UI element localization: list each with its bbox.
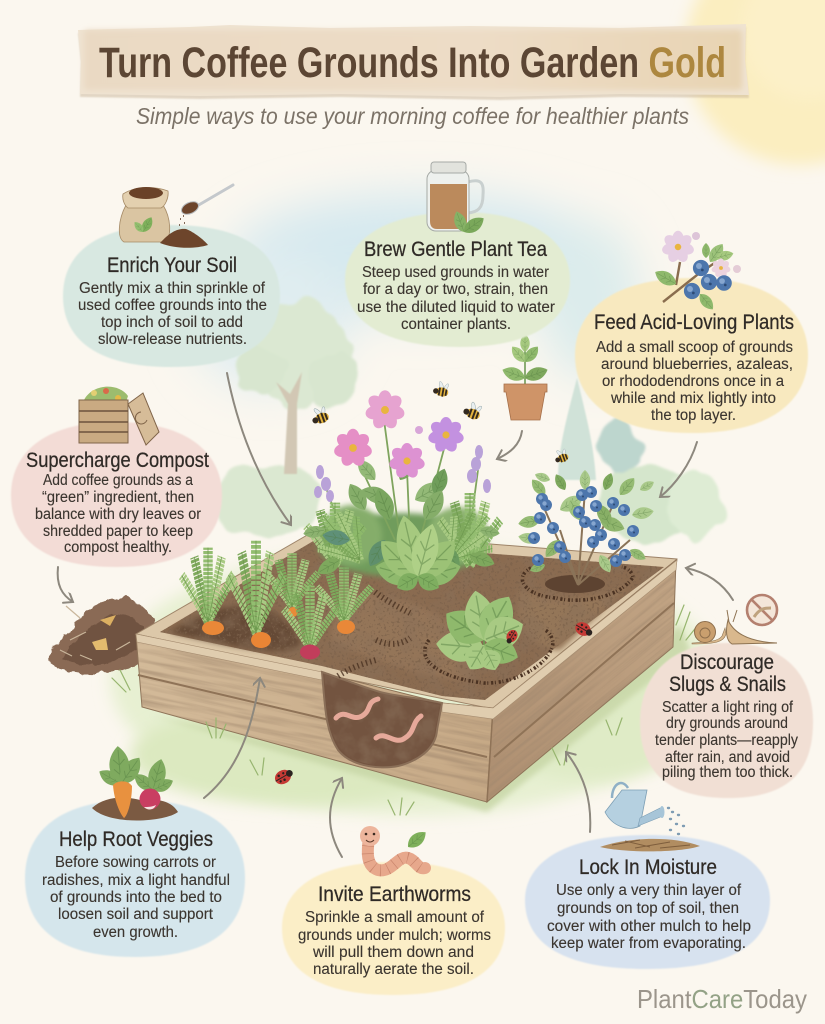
body text: while and mix lightly into	[610, 390, 776, 407]
body text	[78, 280, 267, 348]
raised garden bed	[130, 390, 690, 817]
cutaway soil	[322, 672, 442, 767]
heading: Enrich Your Soil	[107, 254, 237, 277]
title text: Turn Coffee Grounds Into Garden Gold	[99, 39, 726, 87]
panel: invite earthworms	[282, 862, 505, 995]
front face grain	[138, 648, 491, 800]
body text: around blueberries, azaleas,	[601, 356, 793, 373]
body text: Add coffee grounds as a	[43, 472, 193, 489]
body text: cover with other mulch to help	[547, 918, 751, 935]
body text: Steep used grounds in water	[362, 264, 549, 281]
body text: for a day or two, strain, then	[363, 281, 548, 298]
panel: supercharge compost	[11, 422, 222, 567]
ladybug on rim	[573, 619, 595, 640]
arrow: soil to bed	[227, 373, 291, 525]
watercolor sky wash	[190, 193, 640, 390]
body text: top inch of soil to add	[101, 314, 243, 331]
panel: feed acid-loving plants	[575, 278, 808, 433]
ferny sides	[304, 493, 506, 576]
grounds rings and trails	[338, 567, 633, 683]
arrow: root veggies to bed	[204, 678, 260, 798]
bed top rim	[136, 530, 677, 709]
body text: tender plants—reapply	[655, 732, 798, 749]
subtitle: Simple ways to use your morning coffee for healthier plants	[136, 103, 689, 129]
arrow: earthworms to bed	[330, 778, 342, 857]
body text: loosen soil and support	[58, 906, 214, 923]
body text: radishes, mix a light handful	[42, 872, 230, 889]
heading: Discourage	[680, 651, 774, 674]
icon: jar of tea	[427, 162, 487, 237]
icon: coffee sack and spoon	[119, 185, 233, 248]
carrots and radish	[182, 541, 372, 660]
arrow: moisture to bed	[566, 752, 590, 832]
body text: grounds on top of soil, then	[557, 900, 739, 917]
heading: Invite Earthworms	[318, 883, 471, 906]
bees	[309, 380, 570, 464]
front rosette leaves	[372, 513, 464, 595]
body text: the top layer.	[651, 407, 736, 424]
arrow: compost to pile	[58, 567, 73, 602]
icon: compost crate	[79, 387, 159, 445]
soil	[160, 540, 664, 700]
flower cluster	[302, 390, 506, 595]
center leafy plant	[435, 588, 529, 676]
bed shadow	[150, 625, 690, 812]
body text: of grounds into the bed to	[50, 889, 222, 906]
body text	[42, 854, 230, 941]
flower heads	[364, 390, 406, 431]
title banner	[78, 24, 749, 100]
logo: PlantCareToday	[637, 984, 807, 1014]
panel: brew gentle plant tea	[345, 212, 570, 347]
grass tufts	[112, 605, 698, 815]
corner rim boards	[136, 560, 677, 719]
panel: help root veggies	[25, 800, 245, 957]
body text: even growth.	[93, 924, 178, 941]
sun glow	[685, 0, 825, 165]
body text: dry grounds around	[666, 715, 788, 732]
ladybug on grass	[272, 766, 296, 787]
body text: container plants.	[401, 316, 511, 333]
body text: Gently mix a thin sprinkle of	[79, 280, 266, 297]
background trees and hedges	[212, 300, 723, 543]
grassy ground	[110, 545, 720, 815]
body text: compost healthy.	[64, 539, 172, 556]
body text: or rhododendrons once in a	[602, 373, 784, 390]
body text: grounds under mulch; worms	[298, 927, 491, 944]
front left face	[136, 635, 493, 802]
arrows	[58, 373, 733, 857]
icon: snail, slug and no sign	[692, 595, 777, 644]
blueberry bush	[517, 470, 656, 585]
heading: Slugs & Snails	[669, 673, 786, 696]
arrow: tea to flowers	[497, 431, 522, 459]
body text: shredded paper to keep	[43, 523, 193, 540]
panel: lock in moisture	[525, 835, 770, 969]
right face grain	[496, 572, 675, 781]
body text: Before sowing carrots or	[55, 854, 216, 871]
body text: Add a small scoop of grounds	[596, 339, 793, 356]
body text: Use only a very thin layer of	[556, 882, 742, 899]
icon: carrot and radish	[92, 745, 178, 820]
right face	[487, 560, 676, 802]
flower stems	[325, 420, 478, 540]
heading	[669, 651, 786, 696]
body text: after rain, and avoid	[665, 749, 790, 766]
panel: discourage slugs and snails	[640, 643, 813, 798]
arrow: slugs to bed	[686, 568, 733, 600]
body text: naturally aerate the soil.	[313, 961, 474, 978]
body text: will pull them down and	[312, 944, 474, 961]
heading: Help Root Veggies	[59, 828, 213, 851]
body text	[547, 882, 751, 952]
body text: balance with dry leaves or	[35, 506, 201, 523]
heading: Lock In Moisture	[579, 856, 717, 879]
body text: piling them too thick.	[662, 764, 793, 781]
heading: Supercharge Compost	[26, 449, 209, 472]
mid foliage leaves	[302, 456, 501, 579]
body text: “green” ingredient, then	[42, 489, 194, 506]
body text: keep water from evaporating.	[551, 935, 746, 952]
body text: Sprinkle a small amount of	[305, 909, 485, 926]
body text	[298, 909, 491, 978]
body text: use the diluted liquid to water	[357, 299, 555, 316]
panel: enrich your soil	[63, 225, 280, 367]
arrow: acid plants to blueberries	[660, 442, 697, 497]
body text: Scatter a light ring of	[662, 699, 794, 716]
heading: Feed Acid-Loving Plants	[594, 311, 794, 334]
body text: slow-release nutrients.	[98, 331, 247, 348]
icon: blueberry sprig	[652, 231, 741, 313]
soil patches	[160, 540, 664, 700]
body text: used coffee grounds into the	[78, 297, 267, 314]
cutaway mottling	[324, 674, 440, 765]
heading: Brew Gentle Plant Tea	[364, 238, 547, 261]
body text	[655, 699, 798, 781]
lavender spikes	[314, 445, 491, 502]
plank seams	[138, 603, 674, 802]
body text	[357, 264, 555, 333]
body text	[35, 472, 201, 556]
icon: smiling worm and leaf	[360, 826, 429, 870]
body text	[596, 339, 793, 424]
compost pile	[49, 598, 156, 674]
potted plant	[500, 334, 550, 420]
worms in soil	[336, 699, 421, 740]
icon: watering can and mulch	[600, 783, 700, 851]
